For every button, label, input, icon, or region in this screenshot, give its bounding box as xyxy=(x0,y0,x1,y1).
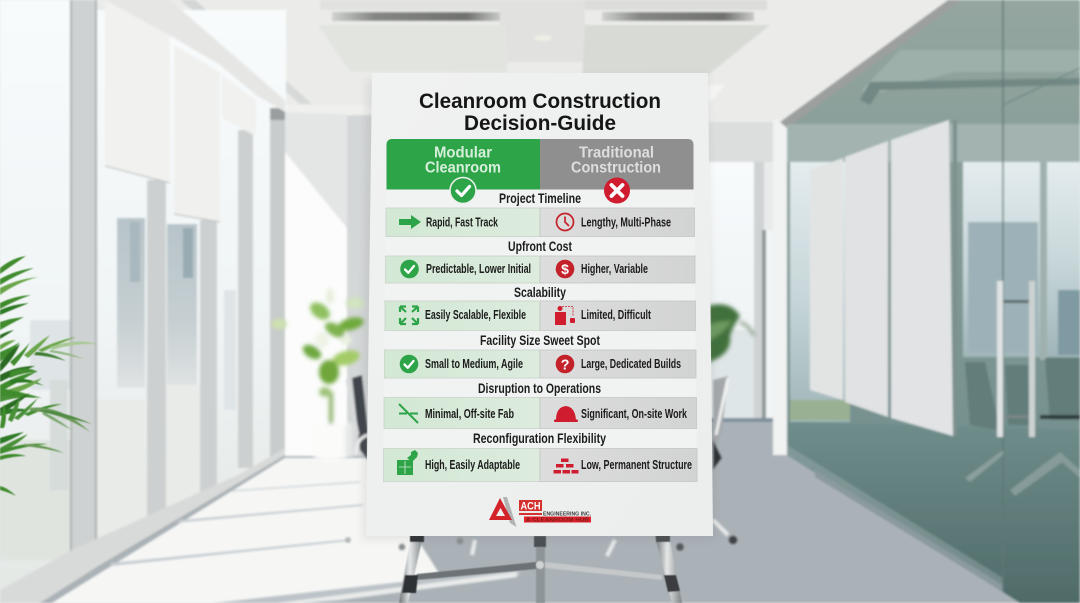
icon: green arrow xyxy=(399,215,421,229)
floor xyxy=(40,420,1025,603)
section: reconfiguration flexibility: Low, Permanent Structure xyxy=(581,457,692,472)
centre window xyxy=(708,162,776,422)
section: upfront cost: Upfront Cost xyxy=(508,238,572,254)
palm plant xyxy=(0,256,98,496)
section: project timeline: Rapid, Fast Track xyxy=(426,214,499,230)
icon: green expand arrows xyxy=(400,306,418,324)
section: facility size sweet spot xyxy=(384,331,696,378)
section: disruption to operations xyxy=(384,378,696,428)
ceiling xyxy=(96,0,960,162)
column header: traditional construction xyxy=(540,139,694,190)
section: reconfiguration flexibility: Reconfiguration Flexibility xyxy=(473,430,606,446)
icon: red brick wall xyxy=(554,458,578,474)
section: upfront cost: Predictable, Lower Initial xyxy=(426,261,531,276)
section: disruption to operations: Significant, On-site Work xyxy=(581,406,688,421)
middle fronds xyxy=(0,335,98,414)
section: project timeline: Project Timeline xyxy=(499,190,581,206)
distant plant xyxy=(708,304,754,363)
icon: red limited blocks xyxy=(555,306,575,325)
section: scalability: Limited, Difficult xyxy=(581,307,651,322)
column header: traditional construction: Traditional xyxy=(579,144,654,162)
column header: traditional construction: Construction xyxy=(571,160,661,176)
logo wordmark: ENGINEERING INC. xyxy=(543,512,591,518)
section: facility size sweet spot: Facility Size Sweet Spot xyxy=(480,332,600,348)
icon: green check badge xyxy=(450,178,476,204)
section: disruption to operations: Minimal, Off-site Fab xyxy=(425,406,514,421)
column header: modular cleanroom xyxy=(386,139,540,190)
section: project timeline: Lengthy, Multi-Phase xyxy=(581,214,671,230)
logo mark: triangle xyxy=(489,497,516,527)
section: disruption to operations: Disruption to Operations xyxy=(478,380,601,396)
blurred potted plant xyxy=(271,288,365,461)
icon: red hard hat xyxy=(554,406,578,422)
easel legs xyxy=(399,536,682,603)
title: Cleanroom Construction xyxy=(419,89,661,113)
title: Decision-Guide xyxy=(464,111,616,135)
window blinds xyxy=(96,0,285,222)
column header: modular cleanroom: Cleanroom xyxy=(425,160,501,176)
door handles xyxy=(997,281,1035,437)
upper fronds xyxy=(0,256,38,339)
white wall panels xyxy=(810,120,957,436)
section: reconfiguration flexibility xyxy=(384,429,697,482)
icon: green check xyxy=(400,355,418,373)
icon: red cross badge xyxy=(604,178,630,204)
section: reconfiguration flexibility: High, Easily Adaptable xyxy=(425,457,520,472)
office chairs xyxy=(345,375,738,556)
logo wordmark: A CLEANROOM HUB xyxy=(526,518,589,524)
left window wall xyxy=(0,0,286,603)
icon: green crossed line xyxy=(399,404,418,423)
section: scalability: Easily Scalable, Flexible xyxy=(425,307,526,322)
side wall xyxy=(285,112,373,460)
section: facility size sweet spot: Large, Dedicated Builds xyxy=(581,356,681,371)
section: scalability xyxy=(385,284,696,330)
white pillar xyxy=(773,120,787,455)
glass wall xyxy=(780,0,1080,603)
logo wordmark xyxy=(519,500,591,524)
column header: modular cleanroom: Modular xyxy=(434,144,492,162)
icon: red dollar xyxy=(556,260,574,278)
icon: green check xyxy=(400,260,419,278)
section: scalability: Scalability xyxy=(514,284,566,300)
section: project timeline xyxy=(386,190,694,236)
title xyxy=(419,89,661,135)
easel xyxy=(399,533,682,603)
lower fronds xyxy=(0,398,92,496)
section: upfront cost: Higher, Variable xyxy=(581,261,648,276)
icon: green puzzle pieces xyxy=(397,450,418,475)
icon: red clock xyxy=(556,214,574,230)
reflected chairs xyxy=(965,358,1080,496)
section: facility size sweet spot: Small to Medium, Agile xyxy=(425,356,523,371)
icon: red dollar: $ xyxy=(561,261,569,277)
icon: red question mark: ? xyxy=(561,358,570,374)
logo wordmark: ACH xyxy=(520,500,541,512)
easel braces xyxy=(402,533,680,593)
icon: red question mark xyxy=(556,355,574,374)
poster shadow xyxy=(362,75,716,540)
section: upfront cost xyxy=(386,237,695,283)
poster board xyxy=(366,73,713,536)
logo: ACH Engineering xyxy=(489,497,591,527)
